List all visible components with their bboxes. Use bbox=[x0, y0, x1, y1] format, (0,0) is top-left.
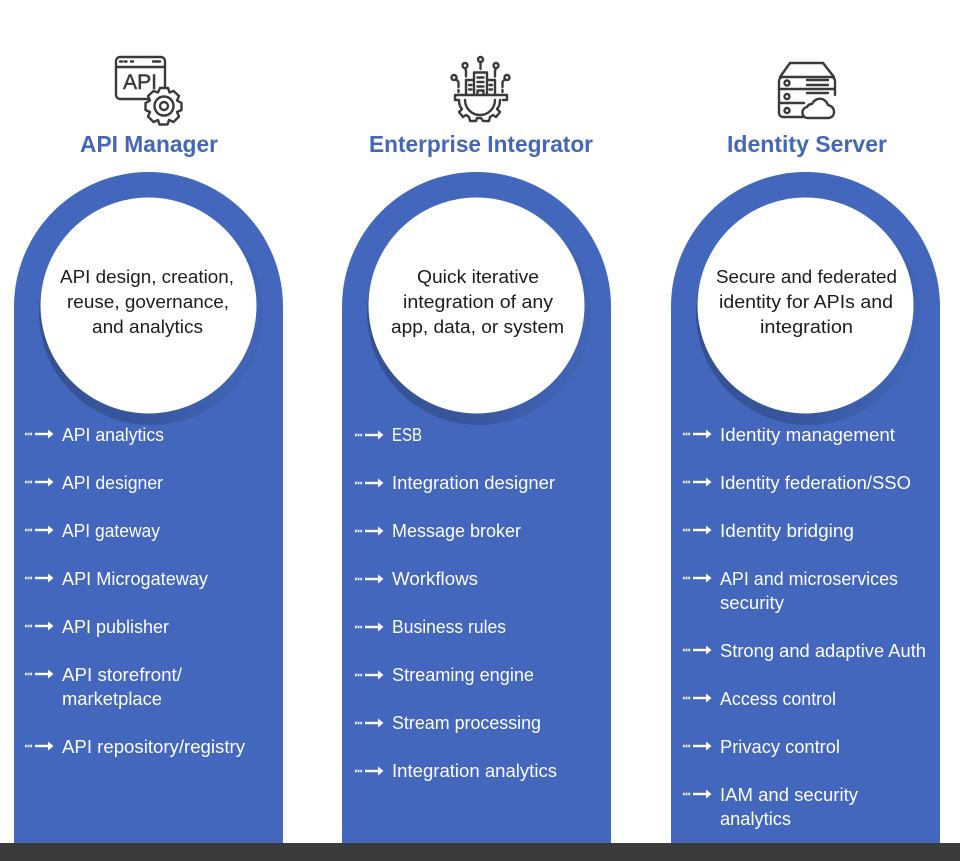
circle text bbox=[716, 267, 897, 337]
panel: Enterprise Integrator bbox=[342, 172, 611, 843]
feature list: analytics bbox=[720, 809, 791, 829]
circle text: Quick iterative bbox=[417, 267, 539, 287]
feature list: Streaming engine bbox=[392, 665, 534, 685]
feature list: Workflows bbox=[392, 569, 478, 589]
feature list: API Microgateway bbox=[62, 569, 208, 589]
feature list: security bbox=[720, 593, 784, 613]
circle bbox=[40, 198, 256, 414]
circle text: and analytics bbox=[92, 317, 203, 337]
feature list: IAM and security bbox=[720, 785, 858, 805]
heading: API Manager: API Manager bbox=[80, 131, 218, 157]
feature list: API designer bbox=[62, 473, 163, 493]
feature list bbox=[683, 425, 926, 829]
feature list: Strong and adaptive Auth bbox=[720, 641, 926, 661]
feature list: API publisher bbox=[62, 617, 169, 637]
column background bbox=[14, 172, 283, 843]
feature list: Identity federation/SSO bbox=[720, 473, 911, 493]
feature list: API and microservices bbox=[720, 569, 898, 589]
feature list: Integration analytics bbox=[392, 761, 557, 781]
icon: API window with gear bbox=[116, 57, 182, 124]
feature list: API repository/registry bbox=[62, 737, 245, 757]
circle bbox=[368, 198, 584, 414]
icon: API window with gear: API bbox=[123, 71, 157, 94]
circle text: app, data, or system bbox=[391, 317, 564, 337]
feature list: ESB bbox=[392, 425, 422, 445]
circle shadow bbox=[39, 201, 263, 425]
circle text: integration of any bbox=[403, 292, 553, 312]
feature list: Privacy control bbox=[720, 737, 840, 757]
circle text: integration bbox=[760, 317, 853, 337]
footer bar bbox=[0, 843, 960, 861]
feature list: Business rules bbox=[392, 617, 506, 637]
feature list: API analytics bbox=[62, 425, 164, 445]
feature list: Identity bridging bbox=[720, 521, 854, 541]
panel: API Manager bbox=[14, 172, 283, 843]
circle shadow bbox=[367, 201, 591, 425]
heading: Enterprise Integrator: Enterprise Integrator bbox=[369, 131, 593, 157]
feature list bbox=[25, 425, 245, 757]
feature list: API gateway bbox=[62, 521, 160, 541]
feature list: API storefront/ bbox=[62, 665, 182, 685]
column background bbox=[342, 172, 611, 843]
circle text: identity for APIs and bbox=[719, 292, 893, 312]
icon: enterprise integration gear bbox=[452, 57, 510, 121]
heading: Identity Server: Identity Server bbox=[727, 131, 887, 157]
feature list bbox=[355, 425, 557, 781]
circle text bbox=[391, 267, 564, 337]
feature list: Identity management bbox=[720, 425, 895, 445]
feature list: Stream processing bbox=[392, 713, 541, 733]
feature list: marketplace bbox=[62, 689, 162, 709]
circle text bbox=[60, 267, 234, 337]
icon: server with cloud bbox=[779, 63, 835, 118]
circle bbox=[698, 198, 914, 414]
circle shadow bbox=[696, 201, 920, 425]
circle text: API design, creation, bbox=[60, 267, 234, 287]
panel: Identity Server bbox=[671, 172, 940, 843]
feature list: Integration designer bbox=[392, 473, 555, 493]
feature list: Access control bbox=[720, 689, 836, 709]
circle text: Secure and federated bbox=[716, 267, 897, 287]
feature list: Message broker bbox=[392, 521, 521, 541]
circle text: reuse, governance, bbox=[67, 292, 229, 312]
column background bbox=[671, 172, 940, 843]
